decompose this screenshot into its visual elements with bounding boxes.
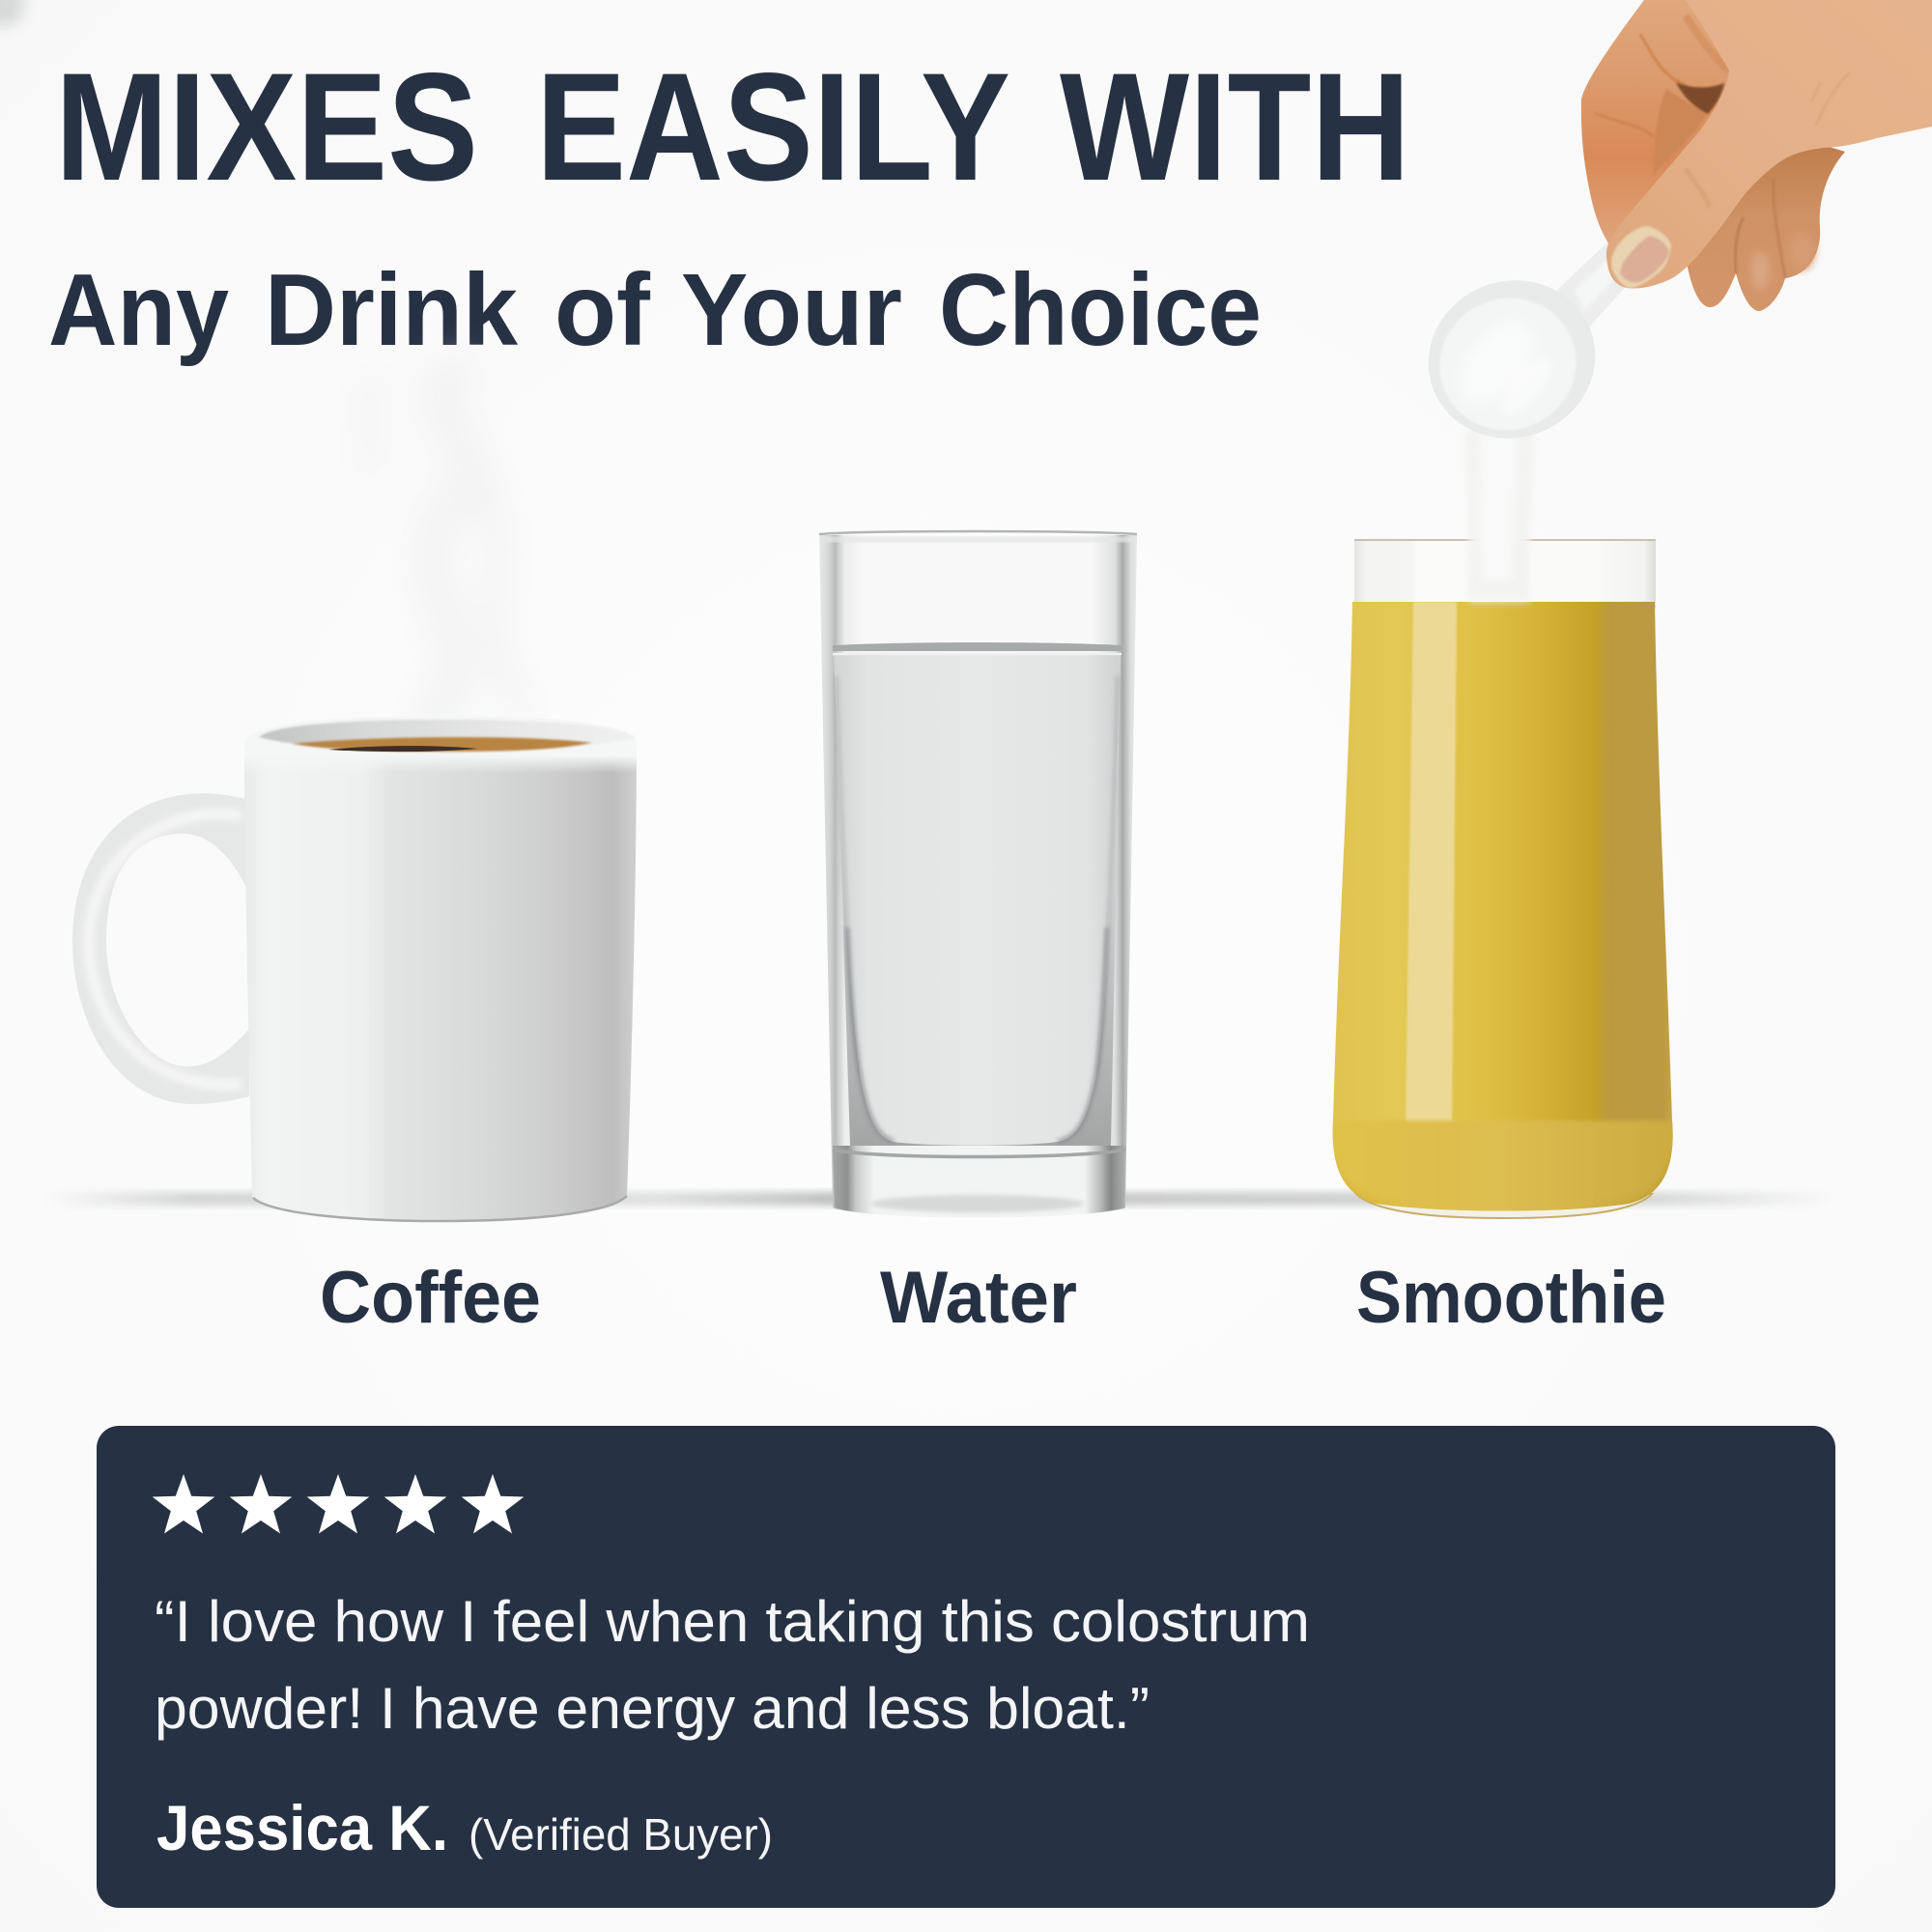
- floor shadow: [48, 1192, 1835, 1206]
- subtitle: Drink: [265, 253, 519, 367]
- curled index finger: [1581, 0, 1731, 243]
- label: coffee: Coffee: [320, 1257, 541, 1339]
- glass base: [833, 1146, 1125, 1217]
- glass bottom: [1356, 1194, 1652, 1218]
- icon: glass of smoothie: [1323, 540, 1681, 1218]
- title: WITH: [1060, 41, 1410, 213]
- panel: testimonial: [97, 1426, 1835, 1908]
- coffee surface: [293, 737, 592, 752]
- dark gap between fingers: [1676, 82, 1724, 114]
- mug body: [244, 717, 637, 1221]
- quote text: [155, 1589, 1310, 1741]
- back of hand lines: [1686, 72, 1850, 208]
- subtitle: Your: [681, 253, 902, 367]
- water surface: [833, 642, 1122, 651]
- subtitle: Any: [48, 253, 229, 367]
- label: water: Water: [880, 1257, 1077, 1339]
- icon: hand with scoop: [1406, 0, 1932, 462]
- powder in scoop: [1421, 279, 1595, 449]
- glass rim: [819, 531, 1137, 534]
- subtitle: Choice: [939, 253, 1262, 367]
- icon: coffee mug: [72, 716, 637, 1221]
- subtitle: of: [554, 253, 651, 367]
- powder stream: [1464, 430, 1534, 601]
- thumb and back of hand: [1606, 0, 1932, 289]
- scoop bowl: [1406, 257, 1617, 462]
- quote text: powder! I have energy and less bloat.”: [155, 1676, 1150, 1741]
- icon: five stars: [153, 1474, 524, 1534]
- smoothie liquid: [1323, 599, 1681, 1217]
- water edge lines: [837, 676, 1118, 1142]
- finger creases: [1594, 15, 1729, 137]
- lower fingers: [1676, 126, 1845, 311]
- scoop handle: [1557, 242, 1625, 330]
- icon: glass of water: [819, 531, 1137, 1217]
- quote text: “I love how I feel when taking this colostrum: [155, 1589, 1310, 1654]
- verified buyer note: (Verified Buyer): [469, 1809, 773, 1860]
- reviewer name: Jessica K.: [156, 1792, 448, 1863]
- water fill: [834, 653, 1121, 1146]
- liquid highlight band: [1406, 602, 1457, 1123]
- mug handle: [72, 793, 249, 1104]
- title: EASILY: [536, 41, 1010, 213]
- liquid bottom layer: [1323, 1121, 1681, 1217]
- thumb nail: [1611, 226, 1671, 288]
- label: smoothie: Smoothie: [1356, 1257, 1666, 1339]
- second finger knuckle: [1654, 89, 1707, 174]
- mug rim lip: [244, 716, 637, 773]
- mug opening: [259, 720, 636, 752]
- title: MIXES: [55, 41, 478, 213]
- glass side shading: [835, 657, 1121, 1146]
- glass body: [819, 535, 1137, 1216]
- glass top: [1354, 541, 1656, 609]
- subtitle: [48, 253, 1262, 367]
- title: [55, 41, 1410, 213]
- steam: [365, 377, 522, 715]
